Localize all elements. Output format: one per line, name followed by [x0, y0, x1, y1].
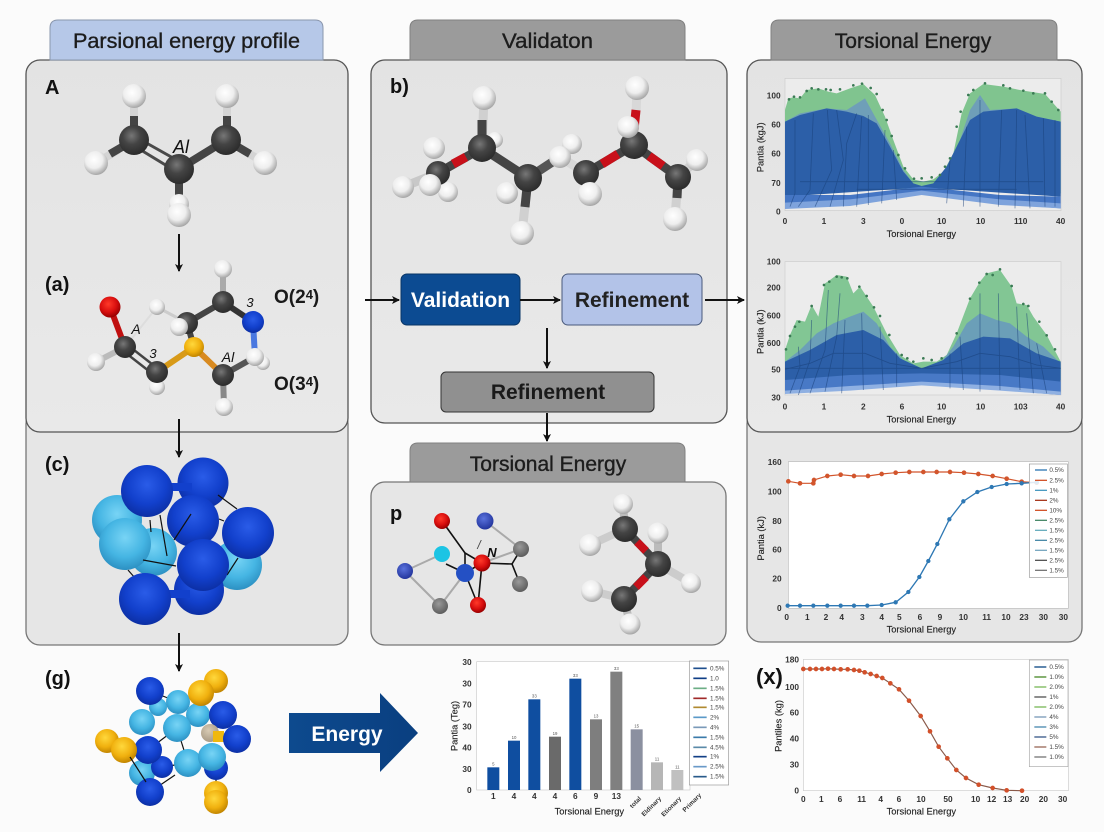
chart: second area plot: 200	[767, 283, 781, 293]
chart: torsional energy bars: Torsional Energy	[555, 807, 624, 817]
chart: torsional energy bars: total	[629, 795, 643, 810]
chart: torsional energy bars: 13	[594, 714, 599, 719]
heading tab: validaton: Validaton	[502, 30, 593, 53]
panel: right column lower section	[747, 410, 1082, 642]
chart: top area plot: 1	[822, 216, 827, 226]
molecule: (a): 3	[246, 295, 254, 310]
chart: top area plot: 60	[771, 120, 781, 130]
chart: torsional energy bars: 4	[512, 791, 517, 801]
arrow: energy	[289, 693, 418, 772]
chart: second area plot: 600	[767, 310, 781, 320]
box: refinement blue	[562, 274, 702, 325]
panel: centre torsional energy	[371, 482, 726, 645]
chart: crossing line plot: 80	[772, 516, 782, 526]
box: validation: Validation	[411, 289, 510, 312]
legend: 1.5%	[710, 695, 725, 702]
chart: second area plot: 50	[771, 365, 781, 375]
legend: 4.5%	[710, 744, 725, 751]
green area	[785, 84, 1061, 193]
orange series	[803, 669, 1022, 791]
chart: decreasing line plot: Pantiles (kg)	[774, 700, 784, 752]
heading tab: torsional energy top	[771, 20, 1057, 60]
legend: 1.5%	[1049, 527, 1064, 534]
chart: torsional energy bars: 11	[655, 757, 660, 762]
chart: crossing line plot: 10	[1001, 612, 1011, 622]
chart: top area plot: 60	[771, 149, 781, 159]
label: (a): (a)	[45, 274, 69, 296]
bars	[487, 672, 683, 790]
chart: crossing line plot: 5	[897, 612, 902, 622]
arrow: refinement to charts	[705, 299, 744, 301]
chart: crossing line plot: 60	[772, 544, 782, 554]
plot lines	[785, 290, 1061, 395]
arrow: refinement down	[546, 328, 548, 368]
chart: crossing line plot: Pantia (kJ)	[756, 516, 766, 561]
legend: 4%	[1049, 714, 1059, 721]
chart: second area plot: Torsional Energy	[887, 415, 956, 425]
legend: 1.5%	[710, 704, 725, 711]
legend: 1.0%	[1049, 674, 1064, 681]
box: validation	[401, 274, 520, 325]
chart: decreasing line plot: 1	[819, 794, 824, 804]
chart: decreasing line plot: 0	[794, 786, 799, 796]
chart: torsional energy bars: 6	[573, 791, 578, 801]
chart: crossing line plot: 9	[938, 612, 943, 622]
chart: top area plot: 110	[1014, 216, 1028, 226]
chart: crossing line plot: 2	[824, 612, 829, 622]
light band	[785, 191, 1061, 209]
chart: torsional energy bars: Pantia (Teg)	[449, 701, 459, 751]
chart: torsional energy bars: 4	[553, 791, 558, 801]
heading tab: validaton	[410, 20, 685, 60]
legend: 1.0%	[1049, 754, 1064, 761]
panel: centre validation	[371, 60, 727, 423]
molecule: (a): A	[130, 321, 141, 337]
molecule: top left Al	[84, 84, 277, 227]
heading tab: torsional energy centre	[410, 443, 685, 482]
panel: left column lower section	[26, 410, 348, 645]
chart: decreasing line plot	[774, 655, 1068, 817]
chart: decreasing line plot: 40	[790, 734, 799, 744]
chart: top area plot: 10	[976, 216, 986, 226]
molecule: p network: N	[487, 545, 497, 560]
legend: 2.5%	[710, 764, 725, 771]
chart: top area plot: 3	[861, 216, 866, 226]
chart: decreasing line plot: 6	[897, 794, 902, 804]
box: refinement grey	[441, 372, 654, 412]
chart: decreasing line plot: Torsional Energy	[887, 807, 956, 817]
label: O(24): )	[313, 287, 319, 308]
chart: top area plot: 40	[1056, 216, 1066, 226]
chart: second area plot: 0	[783, 401, 788, 411]
arrow: c to g	[178, 633, 180, 671]
molecule: top left Al: Al	[172, 137, 190, 157]
light band	[785, 382, 1061, 395]
legend: 2%	[710, 714, 720, 721]
legend: 0.5%	[1049, 467, 1064, 474]
chart: crossing line plot: 4	[879, 612, 884, 622]
chart: torsional energy bars: 10	[512, 735, 517, 740]
chart: torsional energy bars: 1	[491, 791, 496, 801]
molecule: p right ether	[579, 494, 701, 634]
lower band	[785, 187, 1061, 208]
legend: 2.0%	[1049, 704, 1064, 711]
legend: 2.5%	[1049, 557, 1064, 564]
chart: second area plot	[755, 257, 1066, 425]
chart: top area plot: 10	[937, 216, 947, 226]
label: (x): (x)	[756, 664, 783, 689]
label: O(34): )	[313, 374, 319, 395]
chart: torsional energy bars: 30	[462, 657, 472, 667]
chart: crossing line plot: 20	[772, 573, 782, 583]
chart: crossing line plot: Torsional Energy	[887, 625, 956, 635]
chart: torsional energy bars: Eldinary	[640, 795, 663, 818]
chart: decreasing line plot: 100	[785, 682, 799, 692]
legend: 5%	[1049, 734, 1059, 741]
legend: 3%	[1049, 724, 1059, 731]
chart: second area plot: 40	[1056, 401, 1066, 411]
chart: second area plot: 100	[767, 257, 781, 267]
legend: 4%	[710, 724, 720, 731]
heading tab: parsional energy profile	[50, 20, 323, 60]
chart: crossing line plot: 30	[1059, 612, 1068, 622]
label: A: A	[45, 77, 59, 99]
legend	[1029, 660, 1068, 767]
chart: torsional energy bars: 33	[614, 666, 619, 671]
legend: 0.5%	[710, 665, 725, 672]
cluster: (c) blue spheres	[92, 458, 274, 625]
label: (c): (c)	[45, 454, 69, 476]
label: O(24): 4	[306, 287, 314, 302]
chart: torsional energy bars: 70	[462, 700, 472, 710]
panel: right column upper section	[747, 60, 1082, 432]
chart: crossing line plot: 100	[768, 487, 782, 497]
legend: 2.5%	[1049, 477, 1064, 484]
chart: decreasing line plot: 180	[785, 655, 799, 665]
legend: 1%	[710, 754, 720, 761]
chart: torsional energy bars: 13	[612, 791, 621, 801]
chart: second area plot: 10	[937, 401, 947, 411]
chart: crossing line plot: 3	[860, 612, 865, 622]
chart: decreasing line plot: 50	[943, 794, 953, 804]
blue series	[788, 482, 1037, 606]
dark blue area	[785, 108, 1061, 197]
heading tab: parsional energy profile: Parsional energy profile	[73, 30, 300, 53]
label: (g): (g)	[45, 668, 71, 690]
chart: torsional energy bars: Etionary	[660, 795, 683, 818]
chart: crossing line plot: 1	[805, 612, 810, 622]
chart: torsional energy bars: 0	[467, 785, 472, 795]
chart: torsional energy bars: 15	[634, 724, 640, 729]
chart: crossing line plot: 0	[784, 612, 789, 622]
chart: torsional energy bars: 9	[594, 791, 599, 801]
chart: crossing line plot: 6	[918, 612, 923, 622]
legend: 1.5%	[1049, 567, 1064, 574]
chart: decreasing line plot: 10	[971, 794, 981, 804]
chart: second area plot: 10	[976, 401, 986, 411]
chart: torsional energy bars	[449, 657, 729, 818]
molecule: (a)	[87, 260, 270, 416]
plot lines	[790, 100, 1055, 208]
cluster: (g) mixed spheres	[95, 669, 251, 814]
legend: 2.0%	[1049, 684, 1064, 691]
lower band	[785, 373, 1061, 395]
chart: top area plot: 100	[767, 90, 781, 100]
molecule: b ether chain	[392, 76, 708, 245]
label: O(34): O(3	[274, 374, 306, 395]
legend: 1.5%	[710, 685, 725, 692]
chart: crossing line plot: 160	[768, 457, 782, 467]
chart: torsional energy bars: 30	[462, 721, 472, 731]
arrow: a to c	[178, 419, 180, 457]
molecule: p network: /	[476, 538, 482, 552]
label: O(34): 4	[306, 374, 314, 389]
chart: top area plot	[755, 78, 1066, 239]
chart: decreasing line plot: 12	[987, 794, 997, 804]
chart: crossing line plot: 11	[982, 612, 991, 622]
chart: second area plot: 103	[1014, 401, 1028, 411]
chart: crossing line plot: 30	[1039, 612, 1048, 622]
chart: top area plot: 0	[783, 216, 788, 226]
green area	[785, 270, 1061, 380]
molecule: (a): 3	[149, 346, 157, 361]
chart: crossing line plot: 4	[839, 612, 844, 622]
arrow: into validation	[365, 299, 399, 301]
chart: decreasing line plot: 4	[878, 794, 883, 804]
chart: top area plot: Torsional Energy	[887, 229, 956, 239]
legend: 1%	[1049, 487, 1059, 494]
chart: decreasing line plot: 20	[1020, 794, 1030, 804]
chart: top area plot: 0	[776, 206, 781, 216]
chart: second area plot: 1	[822, 401, 827, 411]
dark blue area	[785, 330, 1061, 393]
label: p: p	[390, 503, 402, 525]
label: O(24): O(2	[274, 287, 306, 308]
chart: decreasing line plot: 30	[1058, 794, 1068, 804]
panel: left column upper section	[26, 60, 348, 432]
chart: decreasing line plot: 6	[838, 794, 843, 804]
box: refinement grey: Refinement	[491, 381, 605, 404]
chart: crossing line plot: 0	[777, 603, 782, 613]
chart: decreasing line plot: 60	[790, 707, 799, 717]
arrow: refinement to torsional energy	[546, 413, 548, 441]
legend: 1.5%	[1049, 547, 1064, 554]
chart: crossing line plot: 23	[1019, 612, 1029, 622]
heading tab: torsional energy top: Torsional Energy	[835, 30, 992, 53]
chart: second area plot: 30	[771, 393, 781, 403]
chart: decreasing line plot: 11	[857, 794, 866, 804]
chart: second area plot: 6	[900, 401, 905, 411]
legend: 2%	[1049, 497, 1059, 504]
molecule: p network	[397, 512, 529, 614]
label: b): b)	[390, 76, 409, 98]
chart: torsional energy bars: 30	[462, 678, 472, 688]
legend: 1.0	[710, 675, 719, 682]
chart: crossing line plot: 10	[959, 612, 968, 622]
heading tab: torsional energy centre: Torsional Energy	[470, 453, 627, 476]
molecule: (a): Al	[221, 349, 235, 365]
legend: 1%	[1049, 694, 1059, 701]
chart: top area plot: 0	[900, 216, 905, 226]
legend: 1.5%	[1049, 744, 1064, 751]
chart: second area plot: 600	[767, 338, 781, 348]
legend	[1029, 464, 1067, 577]
chart: second area plot: Pantia (kJ)	[755, 309, 765, 354]
chart: decreasing line plot: 30	[790, 760, 799, 770]
plot markers	[789, 83, 1058, 179]
legend: 10%	[1049, 507, 1062, 514]
legend: 1.5%	[710, 734, 725, 741]
arrow: molecule A to a	[178, 234, 180, 271]
chart: torsional energy bars: 5	[492, 762, 495, 767]
arrow: energy: Energy	[311, 723, 383, 746]
legend: 2.5%	[1049, 517, 1064, 524]
chart: torsional energy bars: 30	[462, 764, 472, 774]
chart: decreasing line plot: 0	[801, 794, 806, 804]
legend	[689, 661, 729, 785]
legend: 0.5%	[1049, 664, 1064, 671]
legend: 2.5%	[1049, 537, 1064, 544]
chart: torsional energy bars: 40	[462, 742, 472, 752]
orange series	[788, 472, 1037, 483]
chart: decreasing line plot: 20	[1039, 794, 1048, 804]
chart: top area plot: Pantia (kgJ)	[755, 122, 765, 172]
mid area	[785, 95, 1061, 193]
chart: crossing line plot	[756, 457, 1068, 635]
chart: decreasing line plot: 13	[1003, 794, 1013, 804]
chart: torsional energy bars: 33	[573, 673, 578, 678]
chart: torsional energy bars: Primary	[681, 792, 703, 814]
legend: 1.5%	[710, 774, 725, 781]
box: refinement blue: Refinement	[575, 289, 689, 312]
chart: decreasing line plot: 10	[916, 794, 926, 804]
arrow: validation to refinement	[520, 299, 560, 301]
chart: torsional energy bars: 11	[675, 764, 680, 769]
chart: top area plot: 70	[771, 178, 781, 188]
mid area	[785, 312, 1061, 380]
chart: second area plot: 2	[861, 401, 866, 411]
chart: torsional energy bars: 33	[532, 694, 537, 699]
chart: torsional energy bars: 4	[532, 791, 537, 801]
chart: torsional energy bars: 19	[553, 731, 558, 736]
